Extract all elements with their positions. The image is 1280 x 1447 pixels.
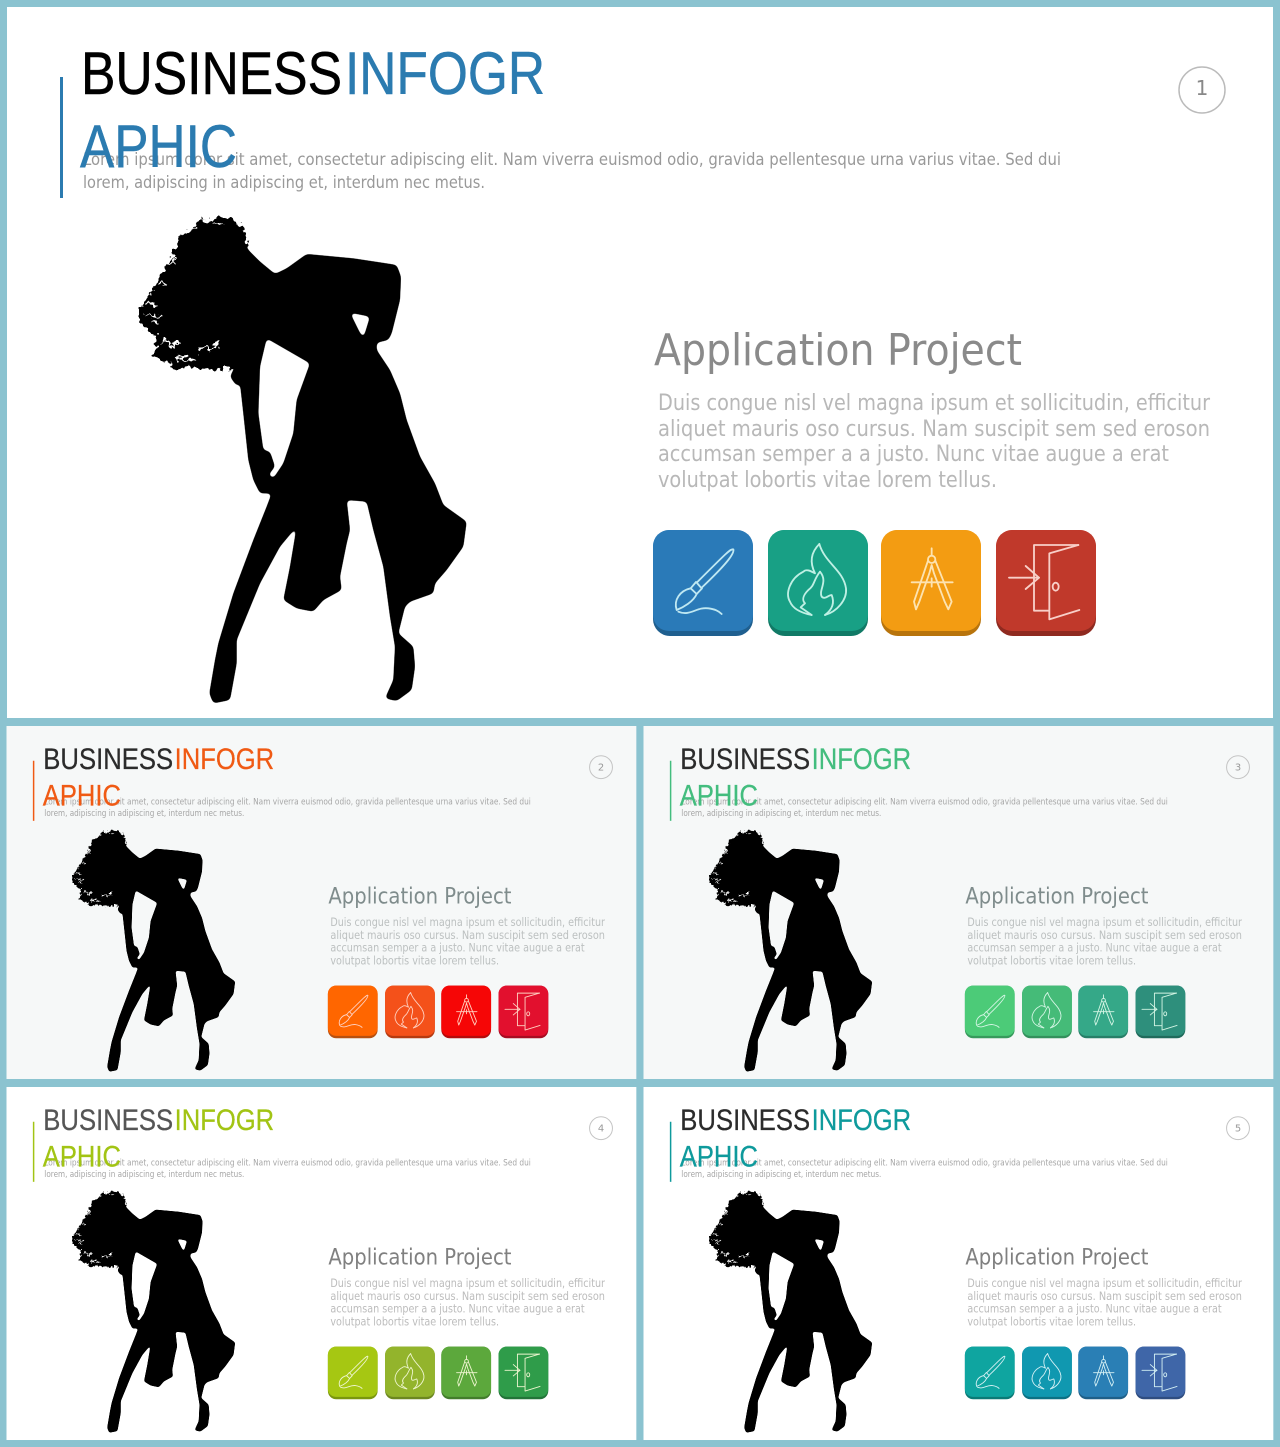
- page number: [1227, 756, 1249, 779]
- intro text: [44, 1157, 531, 1179]
- description: accumsan semper a a justo. Nunc vitae augue a erat: [967, 941, 1222, 954]
- intro text: lorem, adipiscing in adipiscing et, interdum nec metus.: [681, 808, 881, 818]
- intro text: Lorem ipsum dolor sit amet, consectetur adipiscing elit. Nam viverra euismod odio, gravida pellentesque urna varius vitae. Sed dui: [681, 1157, 1168, 1167]
- title: INFOGR: [345, 40, 545, 107]
- silhouette: [140, 217, 467, 703]
- intro text: [681, 796, 1168, 818]
- icon row: [965, 1347, 1185, 1399]
- title: BUSINESS: [680, 743, 810, 776]
- description: accumsan semper a a justo. Nunc vitae augue a erat: [330, 941, 585, 954]
- description: aliquet mauris oso cursus. Nam suscipit sem sed eroson: [967, 1290, 1242, 1303]
- panel: slide 5: [644, 1087, 1273, 1440]
- title: APHIC: [680, 1140, 758, 1173]
- description: Duis congue nisl vel magna ipsum et sollicitudin, efficitur: [330, 1277, 605, 1290]
- heading: Application Project: [328, 885, 512, 910]
- icon row: [965, 986, 1185, 1038]
- description: Duis congue nisl vel magna ipsum et sollicitudin, efficitur: [967, 916, 1242, 929]
- description: aliquet mauris oso cursus. Nam suscipit sem sed eroson: [330, 1290, 605, 1303]
- page number: 4: [598, 1124, 604, 1135]
- icon row: [328, 1347, 548, 1399]
- panel: slide 3: [644, 726, 1273, 1079]
- description: volutpat lobortis vitae lorem tellus.: [967, 954, 1136, 967]
- intro text: Lorem ipsum dolor sit amet, consectetur adipiscing elit. Nam viverra euismod odio, gravida pellentesque urna varius vitae. Sed dui: [44, 1157, 531, 1167]
- intro text: Lorem ipsum dolor sit amet, consectetur adipiscing elit. Nam viverra euismod odio, gravida pellentesque urna varius vitae. Sed dui: [681, 796, 1168, 806]
- intro text: lorem, adipiscing in adipiscing et, interdum nec metus.: [44, 808, 244, 818]
- title: INFOGR: [175, 743, 274, 776]
- silhouette: [710, 830, 872, 1072]
- silhouette: [73, 1191, 235, 1433]
- title: [80, 40, 545, 180]
- description: volutpat lobortis vitae lorem tellus.: [658, 467, 997, 493]
- title: BUSINESS: [43, 1104, 173, 1137]
- heading: Application Project: [965, 885, 1149, 910]
- title: APHIC: [43, 779, 121, 812]
- heading: Application Project: [654, 325, 1022, 376]
- description: volutpat lobortis vitae lorem tellus.: [967, 1315, 1136, 1328]
- accent bar: [60, 77, 63, 198]
- icon row: [328, 986, 548, 1038]
- intro text: lorem, adipiscing in adipiscing et, interdum nec metus.: [681, 1169, 881, 1179]
- intro text: Lorem ipsum dolor sit amet, consectetur adipiscing elit. Nam viverra euismod odio, gravida pellentesque urna varius vitae. Sed dui: [44, 796, 531, 806]
- page number: [590, 756, 612, 779]
- panel: slide 4: [6, 1087, 636, 1440]
- page number: 3: [1235, 763, 1241, 774]
- description: volutpat lobortis vitae lorem tellus.: [330, 954, 499, 967]
- description: [658, 390, 1211, 493]
- page number: 1: [1196, 76, 1208, 100]
- description: Duis congue nisl vel magna ipsum et sollicitudin, efficitur: [967, 1277, 1242, 1290]
- title: [680, 743, 911, 812]
- description: [330, 916, 605, 967]
- description: [967, 1277, 1242, 1328]
- title: APHIC: [680, 779, 758, 812]
- intro text: [83, 150, 1061, 193]
- panel: slide 1: [7, 7, 1273, 718]
- title: [43, 743, 274, 812]
- silhouette: [710, 1191, 872, 1433]
- heading: Application Project: [965, 1246, 1149, 1271]
- icon row: [653, 530, 1096, 636]
- description: aliquet mauris oso cursus. Nam suscipit sem sed eroson: [967, 929, 1242, 942]
- description: accumsan semper a a justo. Nunc vitae augue a erat: [330, 1302, 585, 1315]
- title: APHIC: [43, 1140, 121, 1173]
- title: APHIC: [80, 113, 237, 180]
- accent bar: [33, 761, 34, 821]
- title: [43, 1104, 274, 1173]
- description: accumsan semper a a justo. Nunc vitae augue a erat: [967, 1302, 1222, 1315]
- description: aliquet mauris oso cursus. Nam suscipit sem sed eroson: [330, 929, 605, 942]
- page number: 5: [1235, 1124, 1241, 1135]
- title: [680, 1104, 911, 1173]
- accent bar: [33, 1122, 34, 1182]
- description: [330, 1277, 605, 1328]
- accent bar: [670, 761, 671, 821]
- title: BUSINESS: [43, 743, 173, 776]
- intro text: lorem, adipiscing in adipiscing et, interdum nec metus.: [44, 1169, 244, 1179]
- description: aliquet mauris oso cursus. Nam suscipit sem sed eroson: [658, 416, 1210, 442]
- accent bar: [670, 1122, 671, 1182]
- intro text: Lorem ipsum dolor sit amet, consectetur adipiscing elit. Nam viverra euismod odio, gravida pellentesque urna varius vitae. Sed dui: [83, 150, 1061, 170]
- page number: 2: [598, 763, 604, 774]
- heading: Application Project: [328, 1246, 512, 1271]
- page number: [1227, 1117, 1249, 1140]
- title: BUSINESS: [81, 40, 342, 107]
- title: INFOGR: [175, 1104, 274, 1137]
- page number: [590, 1117, 612, 1140]
- description: [967, 916, 1242, 967]
- description: volutpat lobortis vitae lorem tellus.: [330, 1315, 499, 1328]
- title: BUSINESS: [680, 1104, 810, 1137]
- page number: [1179, 67, 1225, 113]
- description: Duis congue nisl vel magna ipsum et sollicitudin, efficitur: [330, 916, 605, 929]
- silhouette: [73, 830, 235, 1072]
- intro text: lorem, adipiscing in adipiscing et, interdum nec metus.: [83, 173, 485, 193]
- panel: slide 2: [6, 726, 636, 1079]
- intro text: [681, 1157, 1168, 1179]
- intro text: [44, 796, 531, 818]
- title: INFOGR: [812, 1104, 911, 1137]
- title: INFOGR: [812, 743, 911, 776]
- description: accumsan semper a a justo. Nunc vitae augue a erat: [658, 441, 1169, 467]
